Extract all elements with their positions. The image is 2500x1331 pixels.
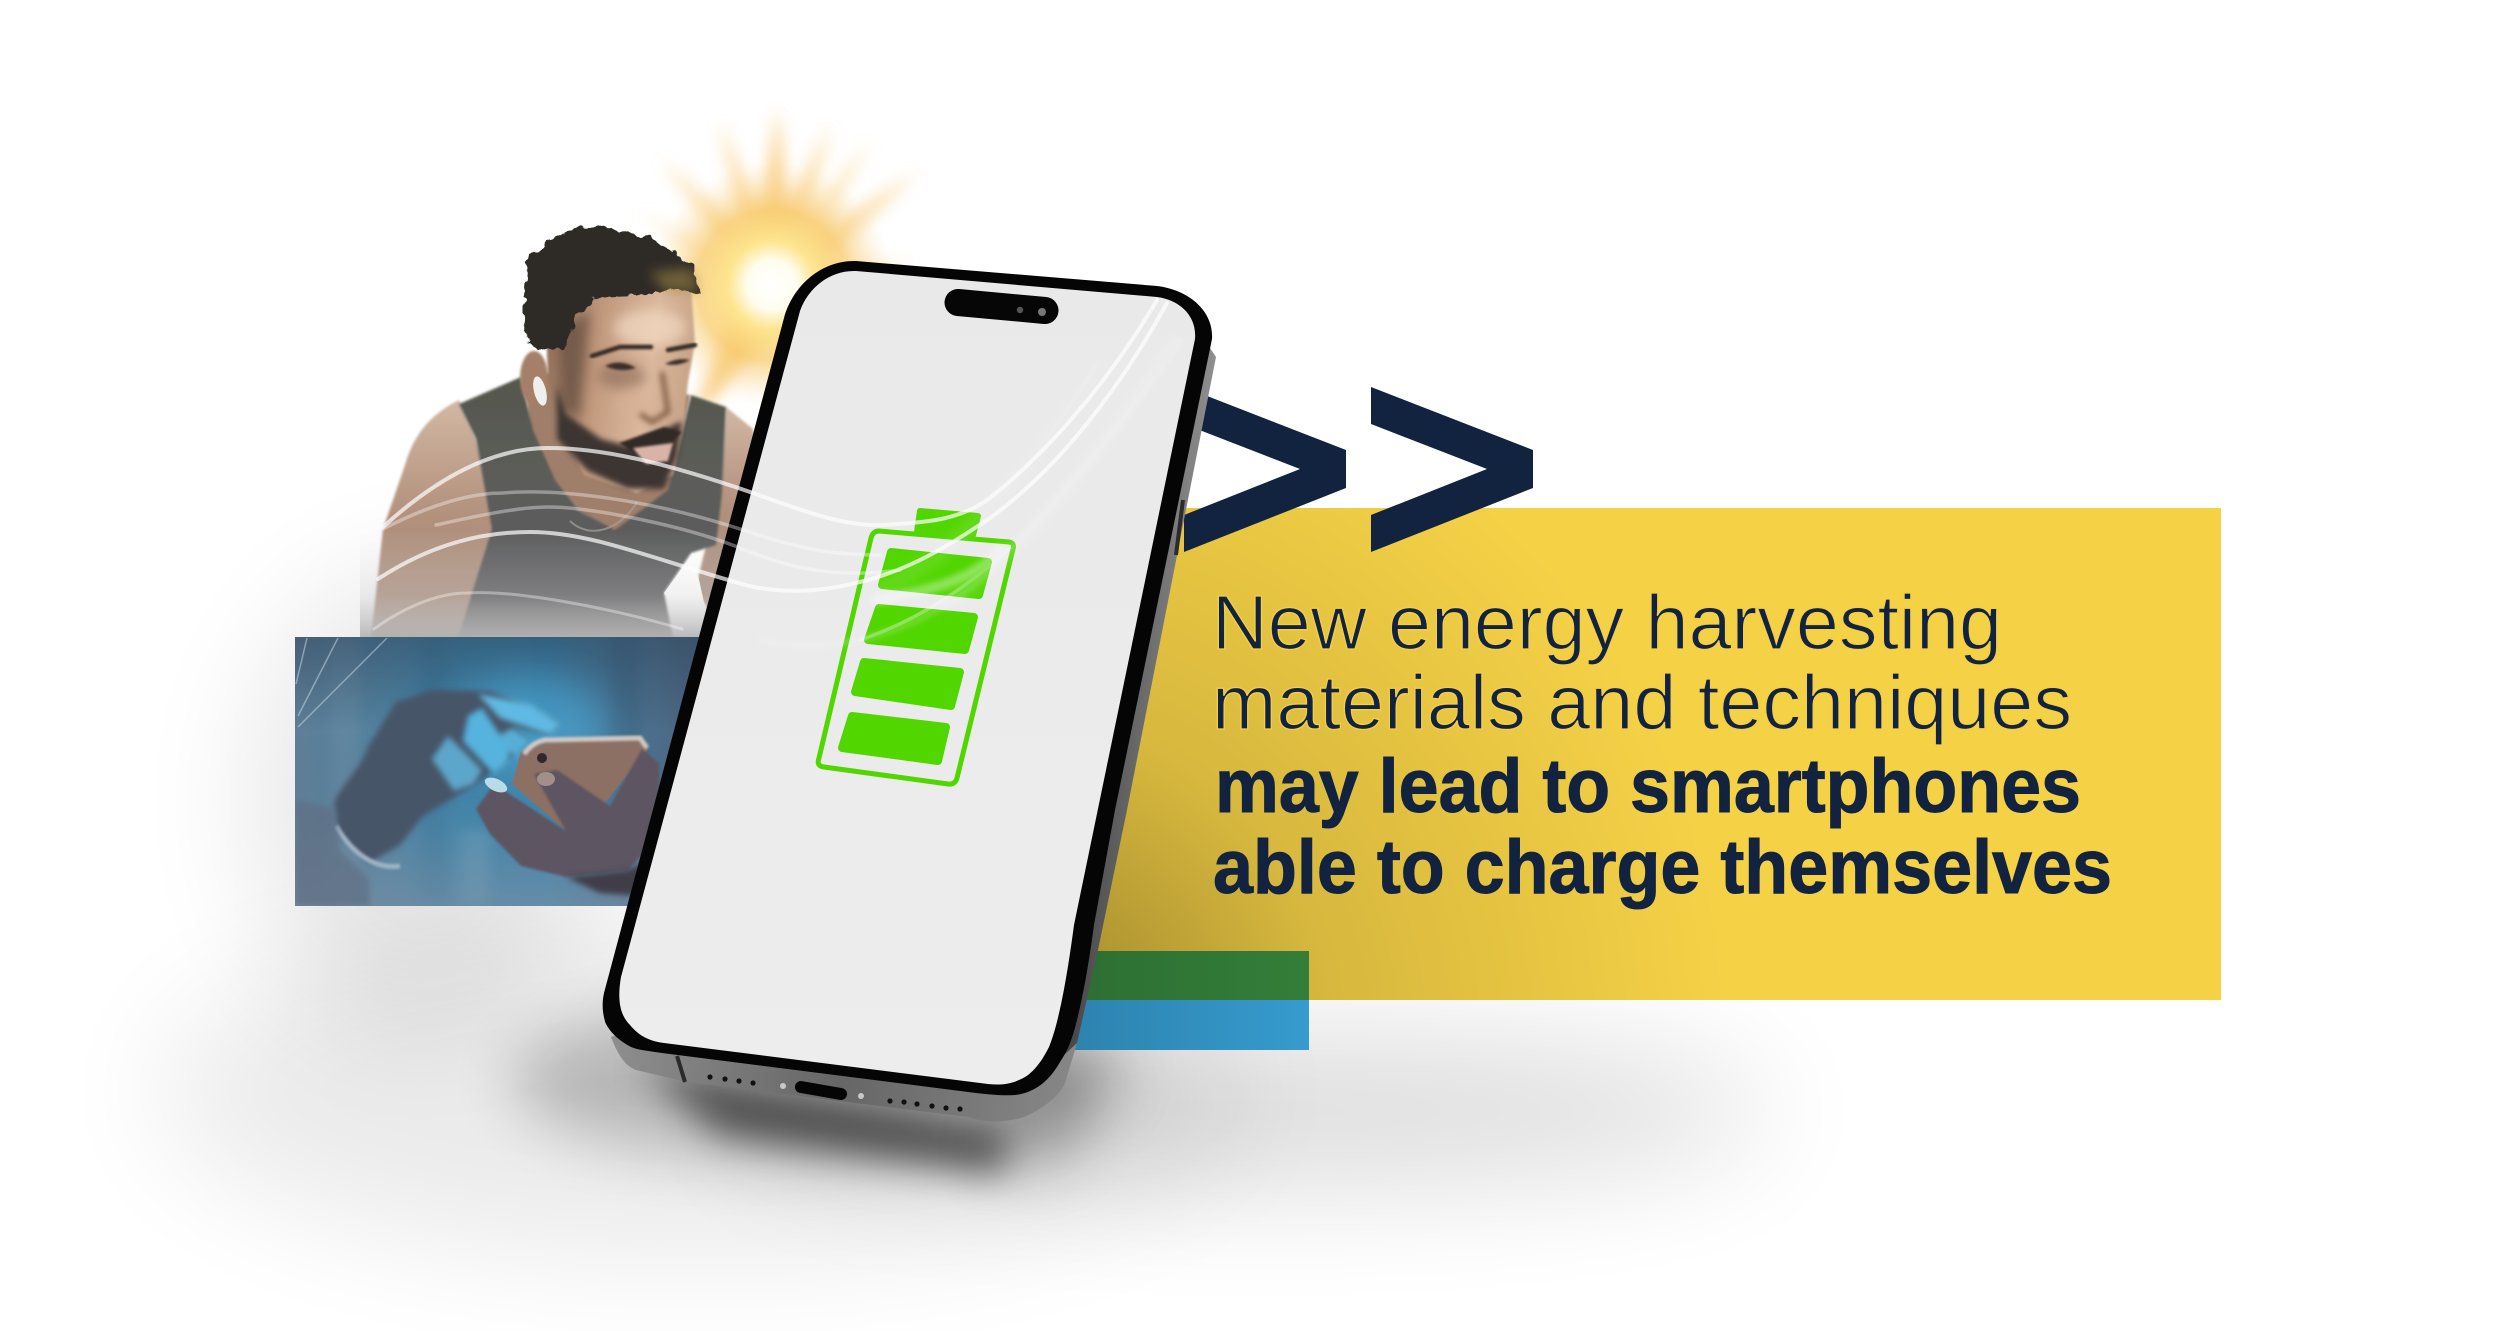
hair <box>523 225 702 350</box>
handset edge <box>524 738 647 754</box>
speaker holes right <box>887 1098 963 1112</box>
phone body side <box>611 1000 1077 1122</box>
moustache <box>619 427 682 452</box>
panel: blue block <box>1000 1000 1309 1050</box>
left hand <box>334 690 561 863</box>
lit fingers <box>432 694 562 791</box>
icon: battery <box>818 511 1014 784</box>
phone screen <box>619 271 1195 1085</box>
headline bold lines: able to charge themselves <box>1213 825 2112 910</box>
temple shade <box>558 310 590 420</box>
phone right edge <box>1064 345 1216 1055</box>
volume button <box>1176 500 1183 555</box>
chevron arrows <box>1184 387 1533 552</box>
eyes <box>605 359 690 370</box>
dynamic island <box>958 302 1046 316</box>
face <box>545 285 695 493</box>
headline bold lines <box>1213 744 2112 910</box>
headline light lines: materials and techniques <box>1212 660 2072 746</box>
icon: sun flare <box>640 108 918 425</box>
headline bold lines: may lead to smartphones <box>1215 744 2081 829</box>
photo: hands holding smartphone <box>295 637 715 906</box>
background drop shadow <box>160 570 1770 1260</box>
finger glow <box>455 675 605 775</box>
headline light lines <box>1212 580 2072 746</box>
left arm and shoulder <box>371 400 500 638</box>
phone black bezel <box>603 261 1212 1095</box>
neck <box>525 370 690 535</box>
cuff <box>336 826 400 867</box>
eyebrows <box>592 345 695 356</box>
sleeve <box>295 800 370 906</box>
phone shadow on yellow panel <box>1000 508 1900 1000</box>
handset camera <box>537 753 547 763</box>
light trails <box>296 638 387 727</box>
hair sun tint <box>650 268 700 292</box>
cheek highlight <box>617 393 653 417</box>
charging port <box>801 1087 841 1094</box>
nose <box>640 372 668 422</box>
ear <box>520 351 548 405</box>
handset <box>512 738 648 834</box>
battery outline <box>818 531 1014 784</box>
right hand <box>476 749 660 877</box>
headline text <box>1212 580 2112 910</box>
gap between arm and torso <box>664 553 712 638</box>
battery cap <box>917 511 978 535</box>
forehead highlight <box>614 310 686 346</box>
energy light trails <box>374 300 1180 646</box>
eye sockets <box>598 363 646 389</box>
speaker holes left <box>707 1074 756 1086</box>
tank top <box>458 377 726 638</box>
necklace <box>570 502 637 531</box>
mouth <box>633 443 673 464</box>
smartphone <box>603 261 1216 1121</box>
earbud <box>531 375 549 407</box>
beard <box>557 386 682 489</box>
headline light lines: New energy harvesting <box>1212 580 2002 666</box>
bottom fade <box>360 530 730 638</box>
right arm <box>695 407 760 610</box>
vertical fabric stripes <box>340 694 632 900</box>
photo: runner with earbud <box>360 225 760 638</box>
screws <box>780 1083 864 1099</box>
panel: green block <box>1000 951 1309 1000</box>
finger nails <box>484 778 508 792</box>
panel: yellow text box <box>1040 508 2221 1000</box>
dark cuff <box>566 862 639 898</box>
antenna band <box>677 1056 685 1082</box>
battery cells <box>842 552 988 761</box>
